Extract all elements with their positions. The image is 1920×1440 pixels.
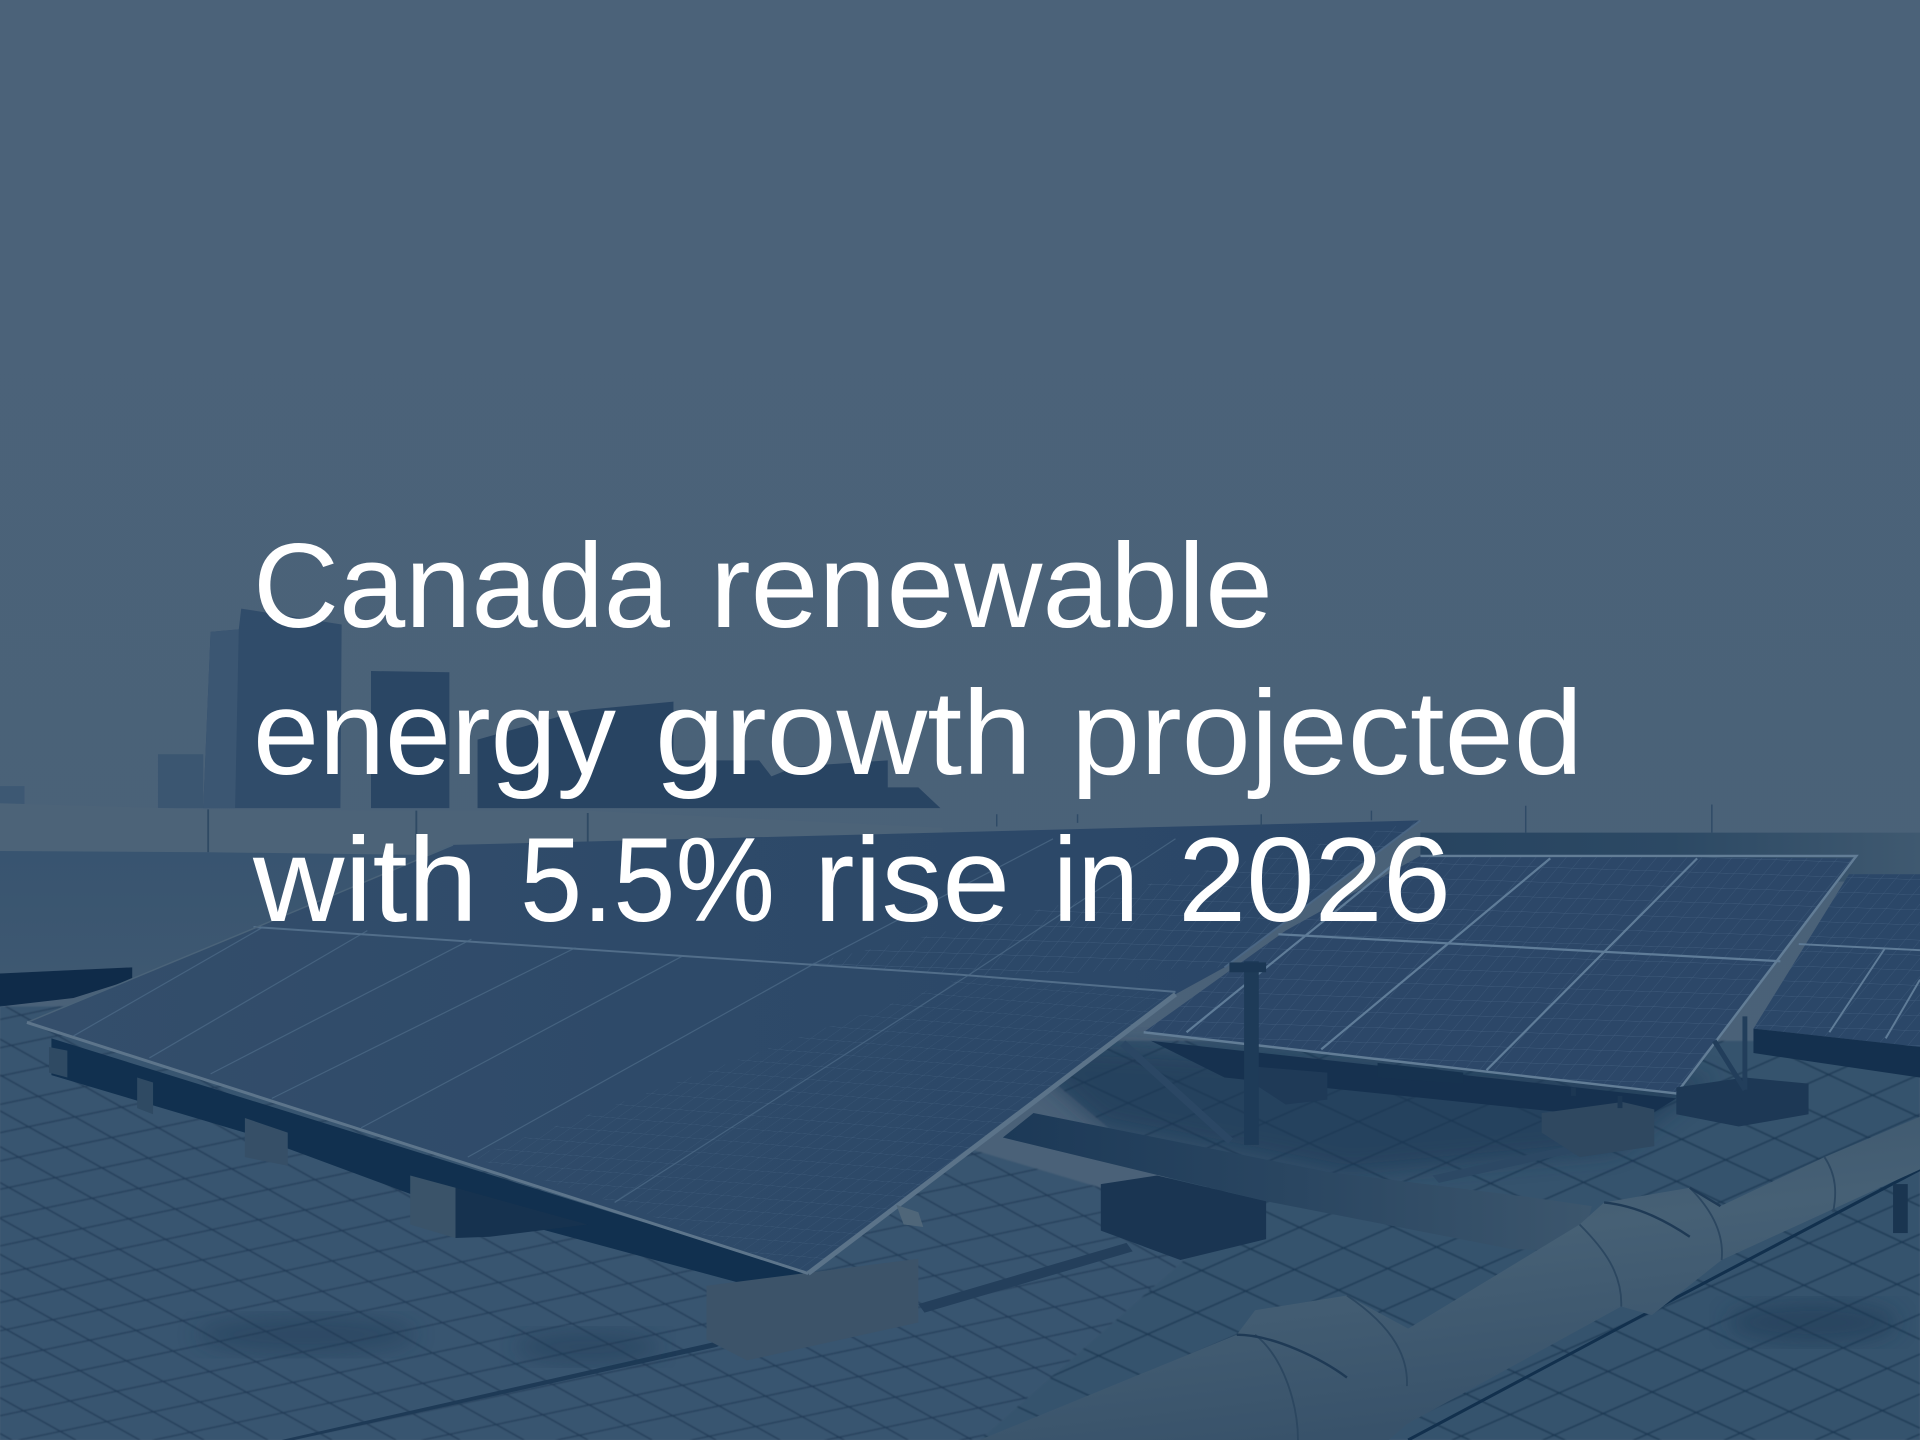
title: Canada [253, 519, 670, 653]
dark footing block under back pipe [1101, 1176, 1266, 1260]
title: energy [253, 666, 616, 800]
city skyline [0, 609, 940, 808]
third solar array, far right [1753, 874, 1920, 1078]
title [252, 519, 1583, 947]
concrete footing blocks under main array [49, 1047, 918, 1360]
back insulated pipe [1003, 1113, 1592, 1251]
support post with bracket and diagonal strut [1123, 961, 1266, 1145]
rooftop tiled floor [0, 1007, 1920, 1440]
title: rise [814, 813, 1010, 947]
mounting clip on main array [896, 1205, 923, 1227]
title: with [252, 813, 478, 947]
shadow beneath main array [51, 1038, 808, 1288]
title: 5.5% [520, 813, 775, 947]
right small post [1893, 1184, 1908, 1233]
title: renewable [710, 519, 1273, 653]
left parapet wall [0, 803, 943, 1007]
second solar array, rear right [1144, 856, 1856, 1093]
front large insulated pipe [980, 1117, 1920, 1440]
distant railing posts [997, 804, 1712, 833]
title: growth [655, 666, 1032, 800]
title: projected [1071, 666, 1583, 800]
title: in [1053, 813, 1139, 947]
title: 2026 [1178, 813, 1451, 947]
main solar array, front left [27, 820, 1420, 1273]
far wall on the right [1420, 833, 1920, 882]
dark shadow under second array and its footing blocks [1151, 1016, 1809, 1157]
